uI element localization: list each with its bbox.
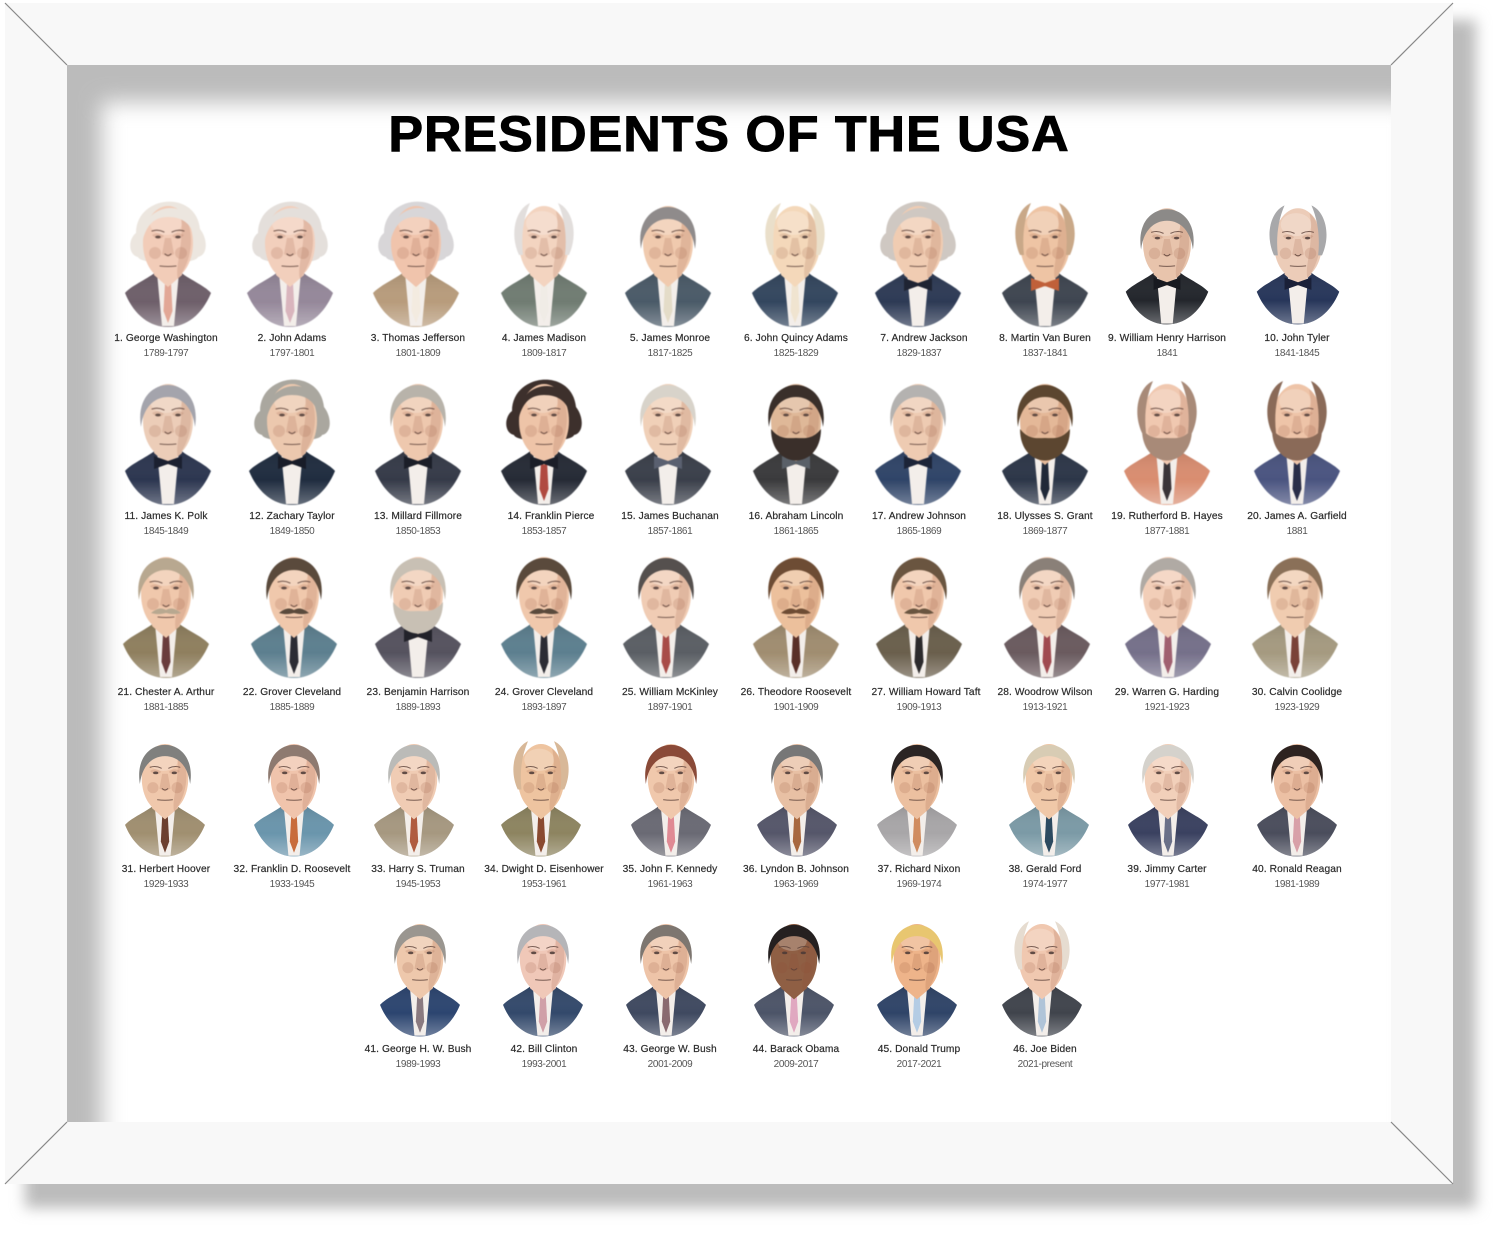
president 21 card: 1881-1885 [144,702,189,713]
president 43 card [623,924,717,1070]
president 5 card: 5. James Monroe [630,333,710,344]
president 15 card [621,384,719,537]
president 39 card: 1977-1981 [1145,879,1190,890]
president 7 card [875,202,968,359]
title: PRESIDENTS OF THE USA [388,106,1070,162]
president 44 card: 44. Barack Obama [753,1044,839,1055]
portrait: Chester A. Arthur [123,557,209,678]
president 21 card [118,557,215,713]
president 34 card: 1953-1961 [522,879,567,890]
portrait: Calvin Coolidge [1252,557,1338,678]
president 40 card: 1981-1989 [1275,879,1320,890]
president 7 card: 7. Andrew Jackson [880,333,968,344]
president 38 card [1009,744,1089,890]
president 8 card: 8. Martin Van Buren [999,333,1091,344]
portrait: Lyndon B. Johnson [757,744,837,857]
portrait: Benjamin Harrison [375,557,461,678]
president 7 card: 1829-1837 [897,348,942,359]
president 6 card [744,203,848,359]
portrait: Ulysses S. Grant [1002,384,1088,505]
president 45 card: 2017-2021 [897,1059,942,1070]
president 46 card: 2021-present [1018,1059,1073,1070]
president 35 card: 1961-1963 [648,879,693,890]
president 12 card [249,380,335,537]
portrait: James Monroe [625,206,711,327]
president 4 card: 1809-1817 [522,348,567,359]
president 6 card: 6. John Quincy Adams [744,333,848,344]
president 22 card: 1885-1889 [270,702,315,713]
portrait: Franklin D. Roosevelt [254,744,334,857]
president 42 card: 42. Bill Clinton [511,1044,577,1055]
president 4 card: 4. James Madison [502,333,586,344]
portrait: Gerald Ford [1009,744,1089,857]
portrait: George H. W. Bush [380,924,460,1037]
portrait: Andrew Jackson [875,202,961,327]
president 39 card: 39. Jimmy Carter [1127,864,1207,875]
president 41 card [365,924,471,1070]
president 33 card: 33. Harry S. Truman [371,864,465,875]
president 41 card: 41. George H. W. Bush [365,1044,471,1055]
portrait: William Howard Taft [876,557,962,678]
president 45 card [877,924,961,1070]
poster opening with inner shadow [67,65,1391,1122]
president 41 card: 1989-1993 [396,1059,441,1070]
president 22 card: 22. Grover Cleveland [243,687,341,698]
portrait: Franklin Pierce [501,380,587,505]
portrait: William Henry Harrison [1126,208,1208,324]
president 20 card [1247,381,1347,537]
president 12 card: 1849-1850 [270,526,315,537]
president 30 card: 30. Calvin Coolidge [1252,687,1342,698]
president 5 card [625,206,711,359]
president 14 card: 14. Franklin Pierce [508,511,595,522]
portrait: Barack Obama [754,924,834,1037]
portrait: Warren G. Harding [1125,557,1211,678]
portrait: George Washington [125,202,211,327]
president 1 card: 1789-1797 [144,348,189,359]
president 16 card [749,384,843,537]
president 3 card: 1801-1809 [396,348,441,359]
president 26 card [741,557,851,713]
president 26 card: 26. Theodore Roosevelt [741,687,851,698]
president 11 card: 1845-1849 [144,526,189,537]
president 40 card [1252,744,1342,890]
president 42 card [503,924,583,1070]
president 29 card: 1921-1923 [1145,702,1190,713]
president 24 card [495,557,593,713]
president 37 card: 1969-1974 [897,879,942,890]
portrait: Joe Biden [1002,921,1082,1037]
portrait: Zachary Taylor [249,380,335,505]
president 27 card: 1909-1913 [897,702,942,713]
president 14 card [501,380,595,537]
portrait: Dwight D. Eisenhower [501,741,581,857]
president 2 card: 2. John Adams [258,333,326,344]
portrait: Harry S. Truman [374,744,454,857]
president 45 card: 45. Donald Trump [878,1044,961,1055]
president 13 card: 13. Millard Fillmore [374,511,462,522]
president 35 card: 35. John F. Kennedy [623,864,718,875]
president 10 card: 1841-1845 [1275,348,1320,359]
president 33 card: 1945-1953 [396,879,441,890]
president 2 card: 1797-1801 [270,348,315,359]
president 2 card [247,202,333,359]
president 3 card [371,202,465,359]
president 31 card: 1929-1933 [144,879,189,890]
portrait: Grover Cleveland [501,557,587,678]
president 46 card [1002,921,1082,1070]
president 43 card: 2001-2009 [648,1059,693,1070]
portrait: James Buchanan [625,384,711,505]
portrait: John Adams [247,202,333,327]
president 25 card [622,557,719,713]
portrait: John Tyler [1257,205,1339,324]
portrait: Grover Cleveland [251,557,337,678]
president 28 card [997,557,1093,713]
president 6 card: 1825-1829 [774,348,819,359]
president 30 card: 1923-1929 [1275,702,1320,713]
president 14 card: 1853-1857 [522,526,567,537]
president 3 card: 3. Thomas Jefferson [371,333,465,344]
president 36 card: 1963-1969 [774,879,819,890]
portrait: William McKinley [623,557,709,678]
president 15 card: 15. James Buchanan [621,511,719,522]
president 32 card: 32. Franklin D. Roosevelt [234,864,350,875]
portrait: Richard Nixon [877,744,957,857]
president 9 card: 9. William Henry Harrison [1108,333,1226,344]
portrait: John Quincy Adams [752,203,838,327]
president 18 card [997,384,1093,537]
portrait: Millard Fillmore [375,384,461,505]
president 36 card: 36. Lyndon B. Johnson [743,864,849,875]
president 5 card: 1817-1825 [648,348,693,359]
portrait: Abraham Lincoln [753,384,839,505]
president 46 card: 46. Joe Biden [1013,1044,1077,1055]
president 9 card: 1841 [1157,348,1178,359]
president 29 card [1115,557,1219,713]
president 23 card: 23. Benjamin Harrison [367,687,469,698]
president 10 card [1257,205,1339,359]
portrait: Rutherford B. Hayes [1124,381,1210,505]
president 40 card: 40. Ronald Reagan [1252,864,1342,875]
portrait: Andrew Johnson [875,384,961,505]
president 38 card: 38. Gerald Ford [1009,864,1082,875]
portrait: Herbert Hoover [125,744,205,857]
president 4 card [501,203,587,359]
president 25 card: 25. William McKinley [622,687,719,698]
president 20 card: 20. James A. Garfield [1247,511,1347,522]
president 17 card: 17. Andrew Johnson [872,511,966,522]
president 17 card: 1865-1869 [897,526,942,537]
president 38 card: 1974-1977 [1023,879,1068,890]
portrait: Donald Trump [877,924,957,1037]
portrait: Ronald Reagan [1257,744,1337,857]
president 32 card [234,744,350,890]
president 35 card [623,744,718,890]
president 27 card [871,557,981,713]
president 43 card: 43. George W. Bush [623,1044,717,1055]
president 37 card: 37. Richard Nixon [878,864,960,875]
portrait: Jimmy Carter [1128,744,1208,857]
portrait: James Madison [501,203,587,327]
president 31 card: 31. Herbert Hoover [122,864,211,875]
president 8 card [999,203,1091,359]
president 34 card [484,741,604,890]
president 33 card [371,744,465,890]
president 1 card: 1. George Washington [114,333,218,344]
president 19 card [1111,381,1223,537]
president 19 card: 1877-1881 [1145,526,1190,537]
president 24 card: 1893-1897 [522,702,567,713]
president 10 card: 10. John Tyler [1264,333,1330,344]
president 44 card: 2009-2017 [774,1059,819,1070]
president 18 card: 1869-1877 [1023,526,1068,537]
president 30 card [1252,557,1342,713]
portrait: Bill Clinton [503,924,583,1037]
portrait: Martin Van Buren [1002,203,1088,327]
president 28 card: 28. Woodrow Wilson [997,687,1093,698]
portrait: Woodrow Wilson [1004,557,1090,678]
president 11 card: 11. James K. Polk [124,511,208,522]
president 23 card: 1889-1893 [396,702,441,713]
president 1 card [114,202,218,359]
president 32 card: 1933-1945 [270,879,315,890]
president 16 card: 16. Abraham Lincoln [749,511,843,522]
president 21 card: 21. Chester A. Arthur [118,687,215,698]
president 25 card: 1897-1901 [648,702,693,713]
president 13 card: 1850-1853 [396,526,441,537]
portrait: James A. Garfield [1254,381,1340,505]
president 31 card [122,744,211,890]
portrait: Theodore Roosevelt [753,557,839,678]
president 22 card [243,557,341,713]
president 36 card [743,744,849,890]
president 13 card [374,384,462,537]
president 39 card [1127,744,1208,890]
president 16 card: 1861-1865 [774,526,819,537]
president 19 card: 19. Rutherford B. Hayes [1111,511,1223,522]
portrait: John F. Kennedy [631,744,711,857]
president 23 card [367,557,469,713]
president 29 card: 29. Warren G. Harding [1115,687,1219,698]
president 15 card: 1857-1861 [648,526,693,537]
president 8 card: 1837-1841 [1023,348,1068,359]
president 9 card [1108,208,1226,359]
president 28 card: 1913-1921 [1023,702,1068,713]
president 18 card: 18. Ulysses S. Grant [997,511,1093,522]
president 24 card: 24. Grover Cleveland [495,687,593,698]
president 20 card: 1881 [1287,526,1308,537]
portrait: George W. Bush [626,924,706,1037]
president 42 card: 1993-2001 [522,1059,567,1070]
president 12 card: 12. Zachary Taylor [249,511,335,522]
president 26 card: 1901-1909 [774,702,819,713]
portrait: James K. Polk [125,384,211,505]
president 34 card: 34. Dwight D. Eisenhower [484,864,604,875]
president 17 card [872,384,966,537]
president 37 card [877,744,960,890]
president 44 card [753,924,839,1070]
portrait: Thomas Jefferson [373,202,459,327]
president 27 card: 27. William Howard Taft [871,687,981,698]
president 11 card [124,384,211,537]
